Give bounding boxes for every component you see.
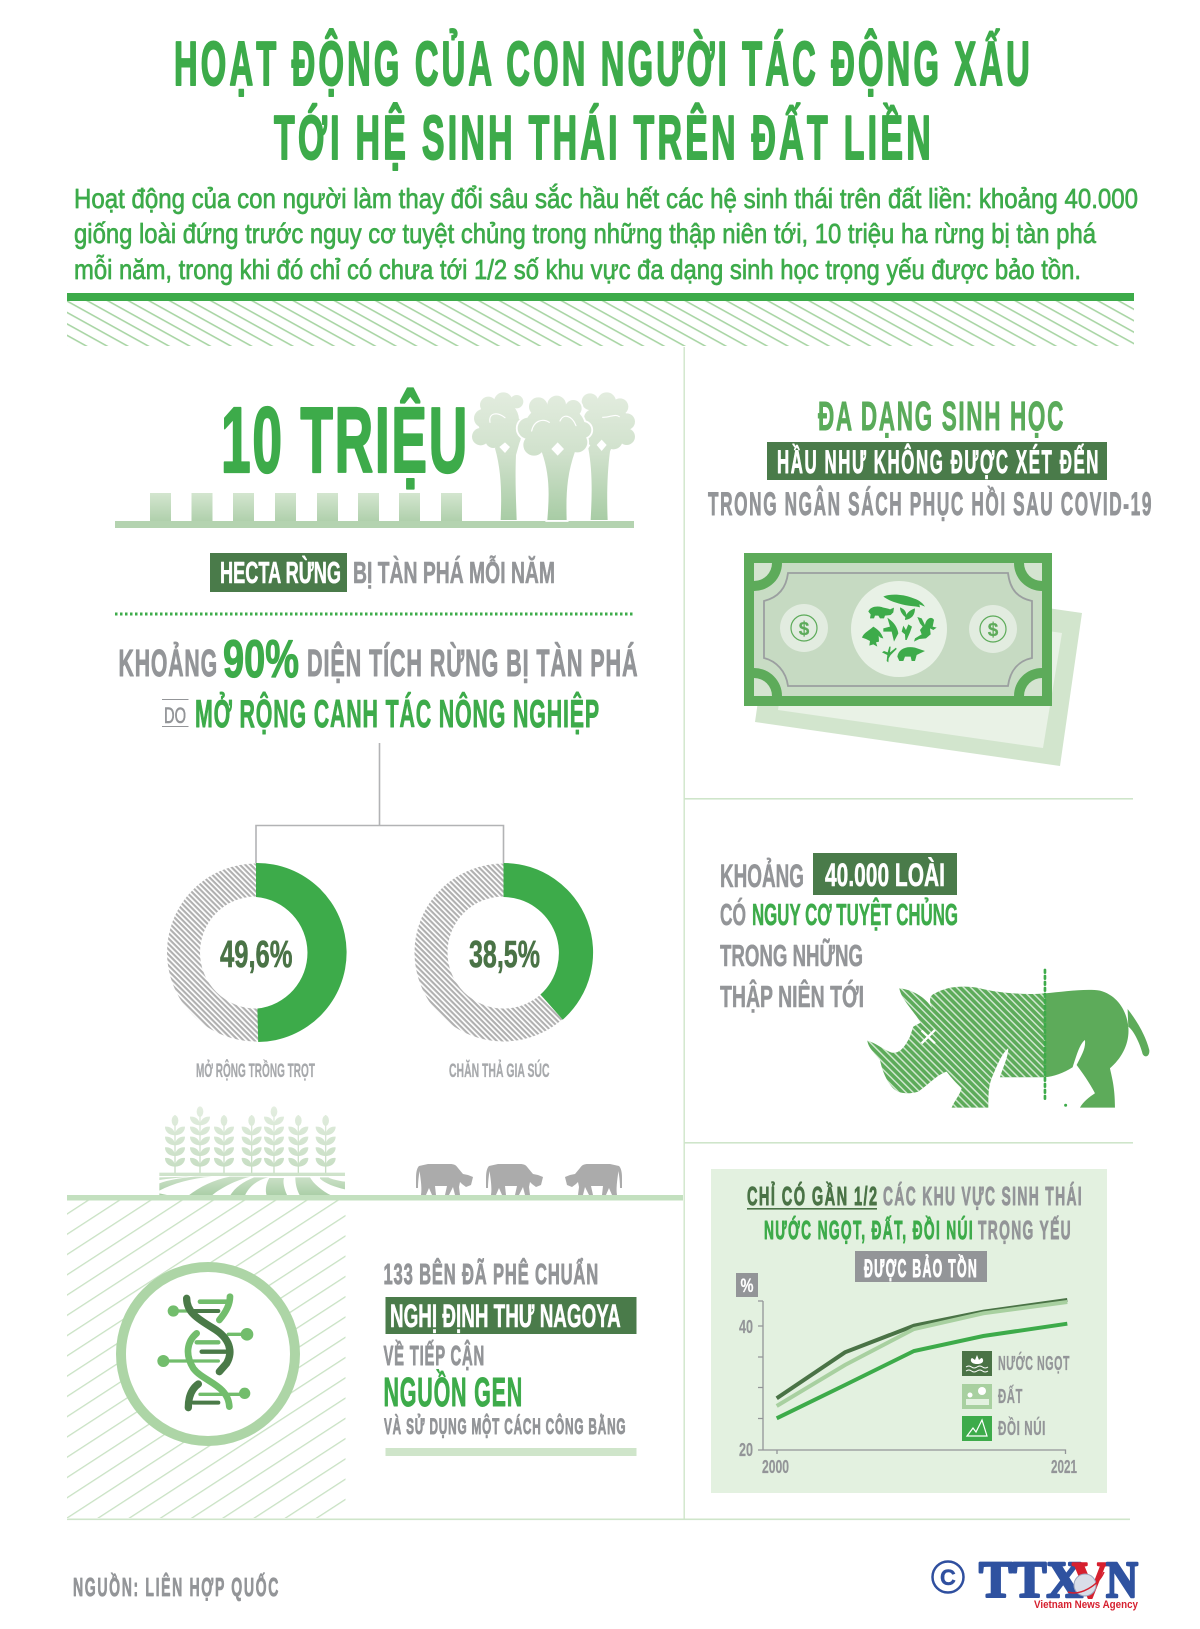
text block: Nagoya protocol: NGHỊ ĐỊNH THƯ NAGOYA [390, 1298, 621, 1334]
text block: species at risk: TRONG NHỮNG [720, 937, 863, 973]
donut chart: crop expansion [184, 863, 347, 1042]
text: 90 percent of deforestation: KHOẢNG [118, 641, 218, 685]
panel: 40,000 species [720, 853, 1149, 1108]
intro paragraph [74, 183, 1138, 285]
logo: TTXVN: V [1072, 1552, 1108, 1609]
label: hectares of forest [210, 553, 555, 592]
donut chart: livestock grazing [431, 863, 593, 1025]
source: NGUỒN: LIÊN HỢP QUỐC [73, 1572, 280, 1602]
icon: animals medallion [851, 581, 947, 677]
text: 90 percent of deforestation: DO [164, 703, 186, 728]
text: 90 percent of deforestation: MỞ RỘNG CANH TÁC NÔNG NGHIỆP [195, 691, 600, 736]
label: hectares of forest: BỊ TÀN PHÁ MỖI NĂM [353, 554, 555, 590]
icon: rhino [867, 970, 1149, 1108]
logo: TTXVN [932, 1552, 1139, 1611]
legend: freshwater [962, 1351, 1070, 1376]
line chart: 40 [739, 1317, 753, 1337]
text block: Nagoya protocol: NGUỒN GEN [384, 1369, 523, 1415]
icon: banknote back [755, 569, 1082, 766]
line chart [736, 1273, 1077, 1477]
heading [708, 393, 1153, 522]
coin right: $ [988, 620, 999, 641]
icon: cleared forest [115, 392, 635, 528]
heading [747, 1181, 1083, 1283]
coin left: $ [799, 619, 810, 640]
heading: TRỌNG YẾU [978, 1215, 1072, 1245]
panel: biodiversity budget [708, 393, 1153, 766]
text block: species at risk [720, 853, 958, 1014]
text block: species at risk: NGUY CƠ TUYỆT CHỦNG [752, 896, 958, 932]
text: 90 percent of deforestation: DIỆN TÍCH RỪNG BỊ TÀN PHÁ [307, 641, 638, 685]
ground line [67, 1195, 683, 1200]
text block: Nagoya protocol: VÀ SỬ DỤNG MỘT CÁCH CÔNG BẰNG [384, 1414, 626, 1439]
line chart: 2000 [762, 1457, 789, 1477]
donut chart: crop expansion: 49,6% [220, 934, 292, 976]
donut chart: livestock grazing: 38,5% [469, 934, 540, 976]
header bar [67, 293, 1134, 301]
text block: species at risk: THẬP NIÊN TỚI [720, 978, 864, 1014]
legend: land: ĐẤT [998, 1385, 1023, 1408]
heading: NƯỚC NGỌT, ĐẤT, ĐỒI NÚI [764, 1215, 974, 1245]
text: 90 percent of deforestation [118, 630, 638, 736]
panel: protected areas chart [711, 1169, 1107, 1493]
legend: freshwater: NƯỚC NGỌT [998, 1351, 1070, 1375]
text block: species at risk: KHOẢNG [720, 858, 804, 894]
connector lines [256, 743, 504, 863]
legend: mountain: ĐỒI NÚI [998, 1416, 1046, 1440]
icon: cows [416, 1164, 622, 1195]
heading: CHỈ CÓ GẦN 1/2 [747, 1181, 878, 1211]
text block: species at risk: CÓ [720, 896, 746, 932]
heading: ĐƯỢC BẢO TỒN [864, 1253, 978, 1283]
legend: mountain [962, 1416, 1046, 1441]
text block: species at risk: 40.000 LOÀI [825, 857, 945, 893]
text block: Nagoya protocol: VỀ TIẾP CẬN [384, 1340, 485, 1371]
panel: 10 million hectares [115, 388, 635, 592]
label: hectares of forest: HECTA RỪNG [220, 554, 341, 590]
title [174, 30, 1033, 173]
coin right [969, 605, 1017, 653]
panel: Nagoya protocol hatch [67, 1200, 346, 1518]
headline number: 10 TRIỆU [221, 388, 469, 492]
logo: TTXVN: Vietnam News Agency [1034, 1599, 1139, 1611]
logo: TTXVN: N [1106, 1552, 1138, 1609]
coin left [780, 604, 828, 652]
line chart: 2021 [1051, 1457, 1077, 1477]
line chart: 20 [739, 1440, 753, 1460]
donut labels [196, 1060, 550, 1082]
donut labels: CHĂN THẢ GIA SÚC [449, 1060, 550, 1082]
logo: TTXVN: TTX [979, 1552, 1083, 1609]
icon: banknote front [744, 553, 1052, 706]
legend: land [962, 1384, 1023, 1409]
icon: wheat field [159, 1106, 345, 1196]
text block: Nagoya protocol [384, 1257, 636, 1456]
icon: DNA in ring [121, 1267, 295, 1441]
logo: TTXVN: C [940, 1565, 956, 1590]
text: 90 percent of deforestation: 90% [223, 630, 299, 689]
donut labels: MỞ RỘNG TRỒNG TRỌT [196, 1060, 315, 1082]
line chart: % [740, 1276, 754, 1297]
text block: Nagoya protocol: 133 BÊN ĐÃ PHÊ CHUẨN [384, 1257, 599, 1291]
